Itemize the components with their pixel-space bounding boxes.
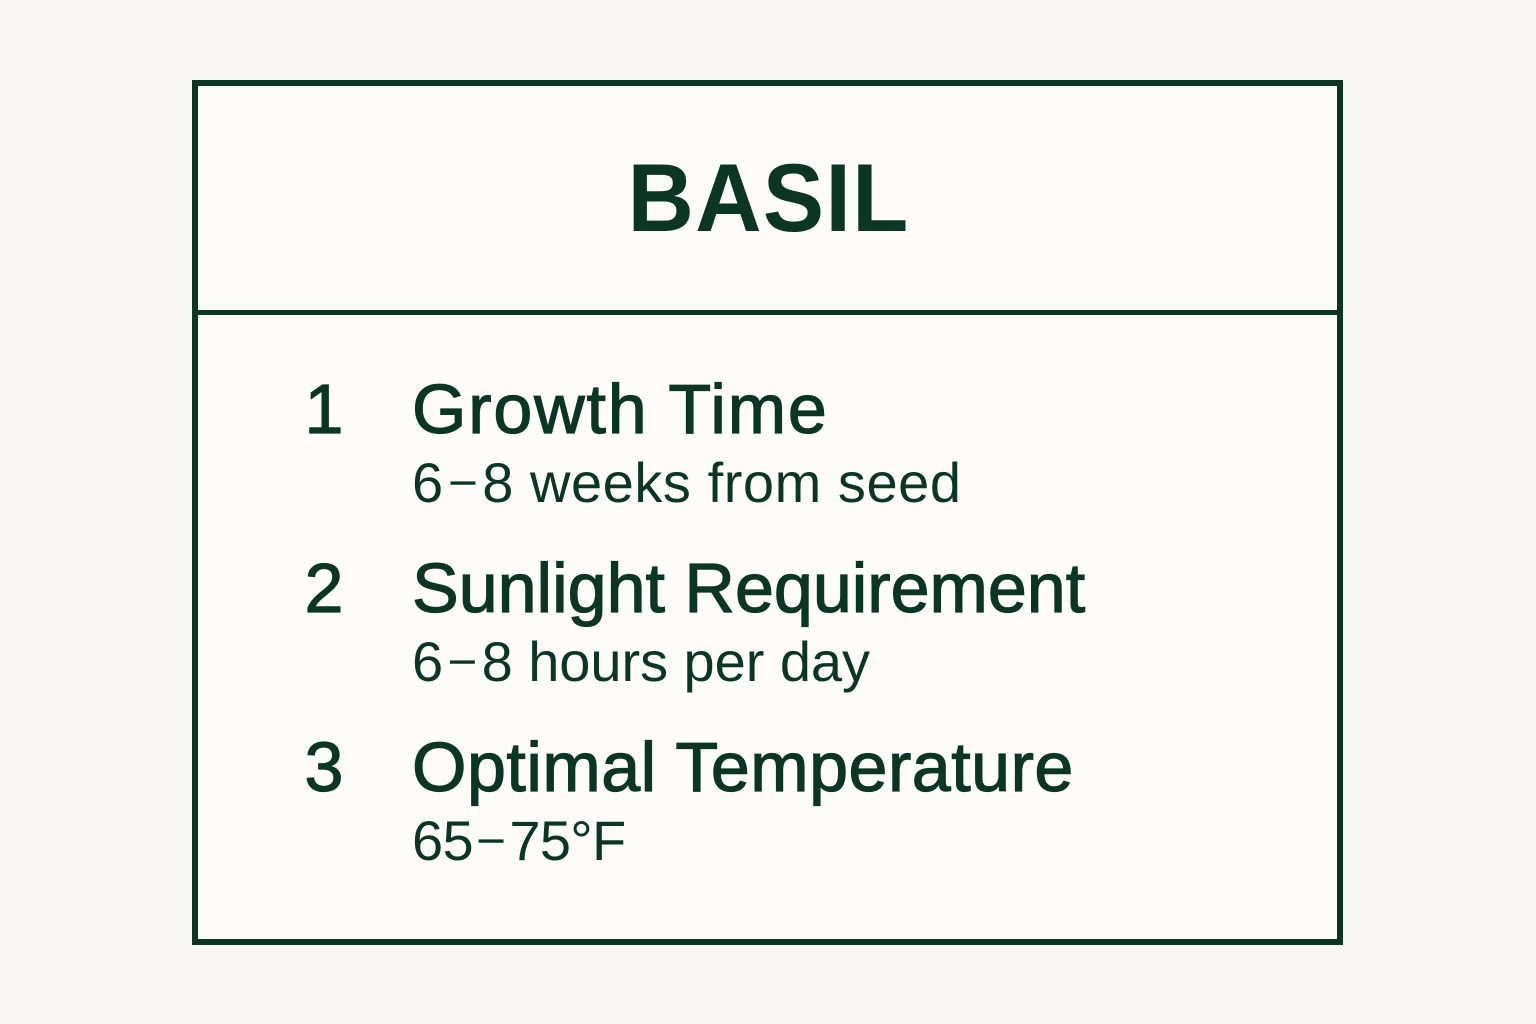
panel: basil card (192, 80, 1343, 945)
number 1: 1 (305, 370, 343, 448)
heading: sunlight requirement: Sunlight Requirement (412, 549, 1085, 627)
number 2: 2 (305, 549, 343, 627)
heading: optimal temperature: Optimal Temperature (412, 728, 1074, 806)
detail: optimal temperature: 65–75°F (412, 809, 625, 872)
detail: growth time: 6–8 weeks from seed (412, 451, 962, 514)
heading: growth time: Growth Time (412, 370, 829, 448)
detail: sunlight requirement: 6–8 hours per day (412, 630, 870, 693)
title: BASIL (628, 145, 910, 252)
header divider (198, 310, 1337, 315)
number 3: 3 (305, 728, 343, 806)
